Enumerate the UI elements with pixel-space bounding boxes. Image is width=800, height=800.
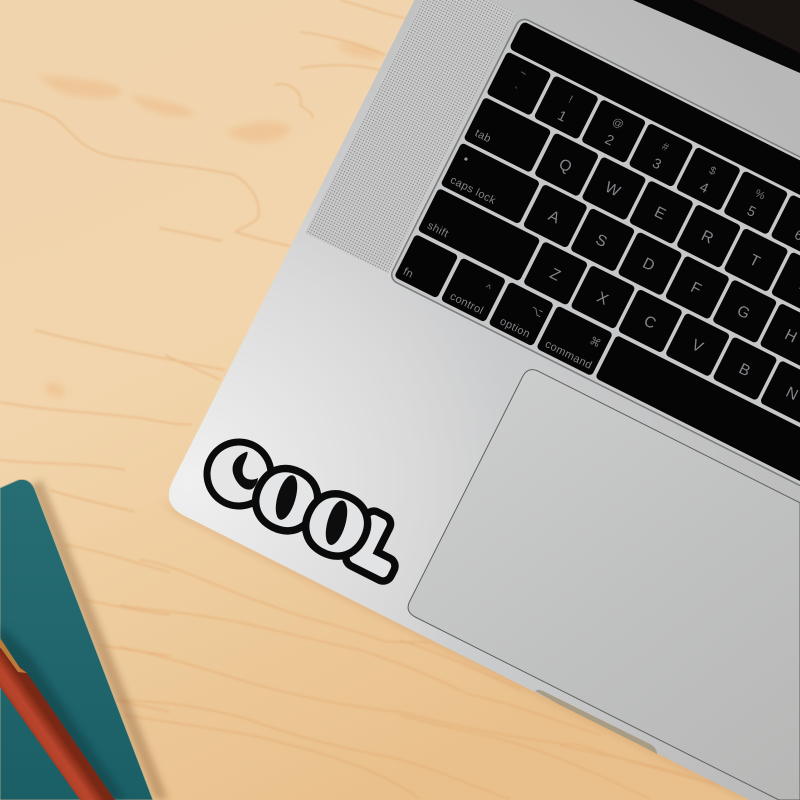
tab row: W	[602, 179, 623, 201]
bottom row: ⌥	[528, 304, 545, 320]
pen shadow	[0, 625, 125, 799]
caps row: H	[782, 326, 799, 346]
tab row: E	[651, 204, 668, 223]
second letter O bubble: O	[299, 484, 373, 567]
number row: 2	[603, 131, 617, 149]
caps row: D	[640, 255, 657, 275]
shift row: C	[641, 313, 659, 333]
display hinge	[633, 0, 800, 73]
keyboard	[389, 16, 800, 557]
bottom row: ⌘	[587, 335, 603, 350]
number row: 1	[555, 107, 570, 125]
caps row	[440, 142, 800, 367]
caps row: F	[688, 279, 704, 298]
number row: 5	[745, 202, 759, 220]
number row: 3	[650, 155, 664, 172]
letter O bubble: O	[249, 459, 323, 542]
number row: %	[753, 187, 767, 203]
number row: #	[660, 141, 671, 154]
number row	[486, 51, 800, 283]
caps row: S	[593, 231, 610, 251]
shift row: X	[594, 289, 611, 309]
caps row: A	[545, 207, 563, 228]
shift row: Z	[547, 265, 563, 285]
number row: `	[510, 85, 518, 98]
tab row: tab	[473, 127, 493, 145]
bottom row: option	[498, 315, 532, 341]
touch bar	[509, 21, 800, 324]
shift row	[417, 188, 800, 425]
number row: $	[707, 164, 718, 178]
number row: 4	[697, 178, 712, 196]
caps row: caps lock	[448, 174, 498, 207]
laptop cast shadow	[160, 500, 780, 799]
second letter O bubble: O	[299, 484, 373, 567]
letter C bubble: C	[203, 435, 274, 516]
shift row: V	[689, 337, 706, 357]
caps row: G	[734, 302, 752, 323]
shift row: B	[736, 360, 753, 380]
notebook shadow	[30, 480, 168, 799]
pen	[0, 638, 115, 800]
COOL sticker	[191, 426, 411, 586]
bottom row: control	[448, 290, 485, 317]
bottom row: ^	[483, 282, 493, 296]
number row: !	[566, 94, 575, 106]
shift row: shift	[425, 220, 450, 240]
thumb notch	[535, 690, 657, 754]
number row: ~	[518, 67, 529, 80]
speaker grille	[305, 0, 515, 273]
letter L bubble: L	[345, 507, 410, 586]
pen clip trim	[0, 638, 27, 673]
sticker letter counters	[233, 452, 351, 547]
number row: @	[610, 116, 625, 131]
laptop body	[169, 0, 800, 800]
bottom row: command	[543, 338, 594, 372]
teal notebook	[0, 479, 153, 800]
letter L bubble: L	[345, 507, 410, 586]
letter O bubble: O	[249, 459, 323, 542]
screen area	[693, 0, 800, 53]
tab row: R	[698, 227, 716, 247]
tab row: T	[747, 251, 763, 271]
trackpad	[408, 370, 800, 800]
tab row	[463, 97, 800, 316]
bottom row: fn	[401, 266, 415, 281]
letter C bubble	[191, 426, 287, 522]
tab row: Q	[556, 156, 574, 176]
bottom row	[394, 234, 800, 552]
